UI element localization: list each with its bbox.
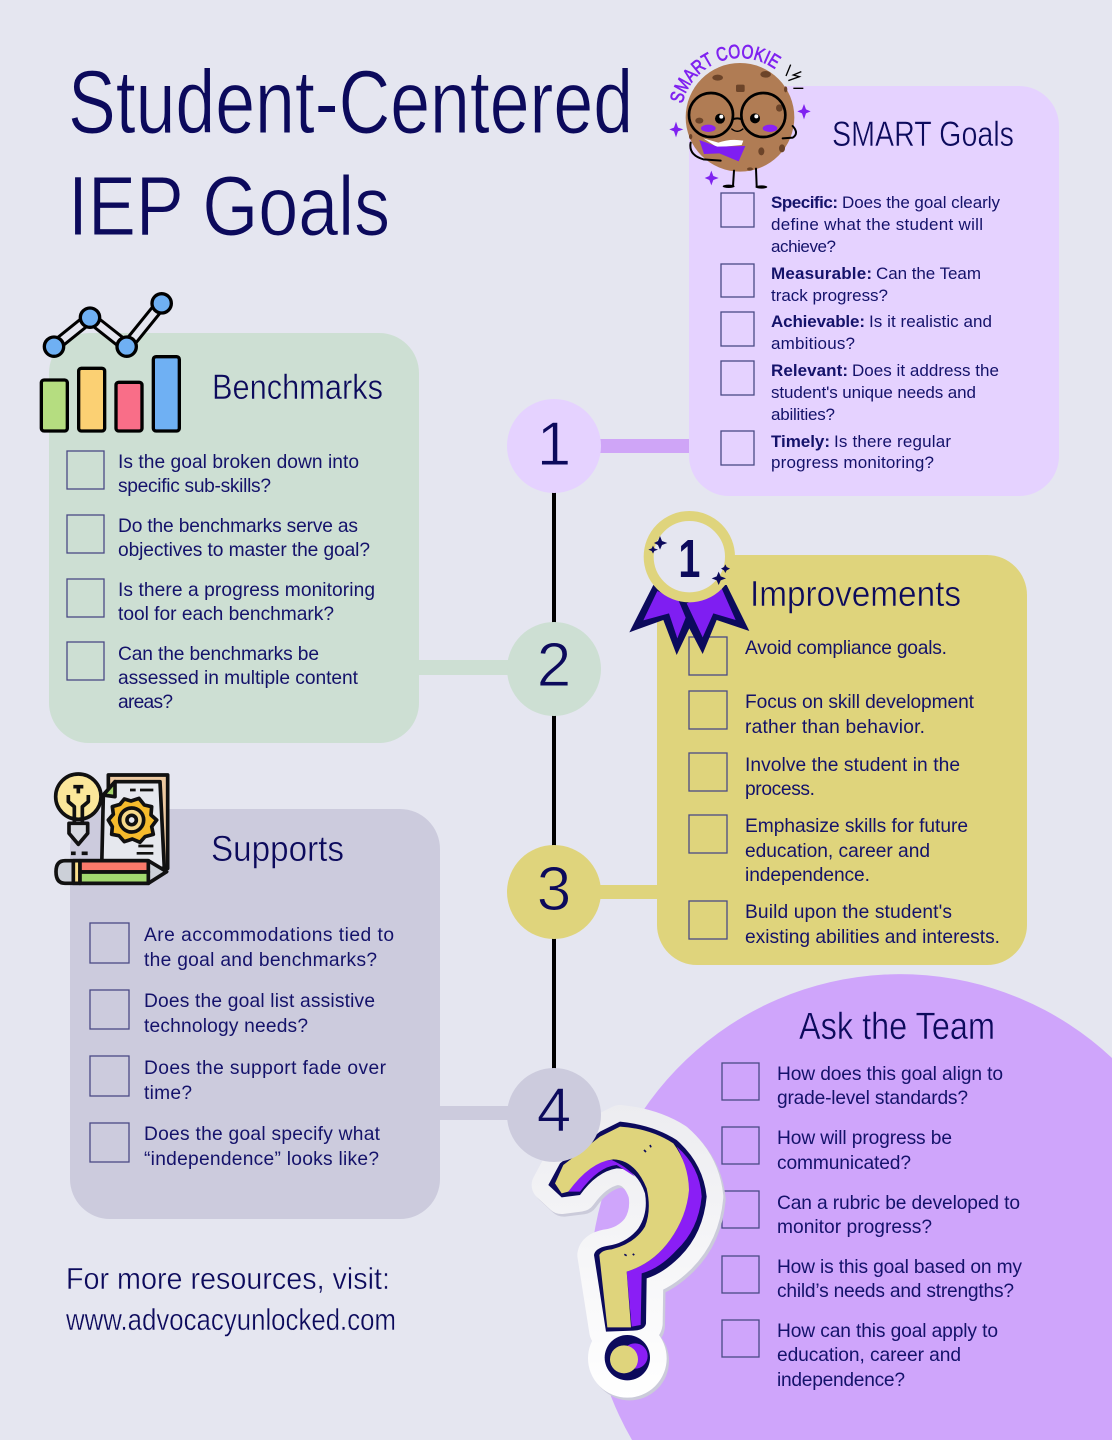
benchmarks checklist text: Do the benchmarks serve as bbox=[118, 516, 358, 537]
icon: idea, gear and pencil bbox=[56, 774, 168, 883]
step 4 circle: 4 bbox=[537, 1076, 571, 1145]
benchmarks checklist text: tool for each benchmark? bbox=[118, 604, 334, 625]
benchmarks checklist text: Is the goal broken down into bbox=[118, 452, 359, 473]
supports checklist text: Does the goal list assistive bbox=[144, 991, 375, 1012]
improvements checklist text: Avoid compliance goals. bbox=[745, 638, 947, 659]
panel: SMART goals bbox=[689, 86, 1059, 496]
improvements checklist text: process. bbox=[745, 779, 815, 800]
improvements checklist text: education, career and bbox=[745, 841, 930, 862]
title: Student-Centered bbox=[68, 53, 633, 153]
checkboxes bbox=[67, 451, 104, 680]
improvements checklist text: existing abilities and interests. bbox=[745, 927, 1000, 948]
benchmarks checklist text: assessed in multiple content bbox=[118, 668, 359, 689]
ask the team checklist text: grade-level standards? bbox=[777, 1088, 968, 1109]
SMART checklist text: ambitious? bbox=[771, 334, 855, 353]
title bbox=[68, 53, 633, 253]
SMART checklist text: Relevant: bbox=[771, 361, 848, 380]
improvements checklist text bbox=[745, 638, 1000, 948]
improvements checklist text: Focus on skill development bbox=[745, 692, 975, 713]
benchmarks checklist text: Is there a progress monitoring bbox=[118, 580, 375, 601]
SMART checklist text: Timely: bbox=[771, 432, 830, 451]
benchmarks checklist text: objectives to master the goal? bbox=[118, 540, 370, 561]
panel: improvements bbox=[657, 555, 1027, 965]
SMART checklist text: progress monitoring? bbox=[771, 453, 934, 472]
panel: benchmarks bbox=[49, 333, 419, 743]
ask the team checklist text: communicated? bbox=[777, 1153, 911, 1174]
SMART checklist text: achieve? bbox=[771, 237, 836, 256]
footer: resources: For more resources, visit: bbox=[66, 1261, 390, 1296]
checkboxes bbox=[689, 637, 727, 939]
SMART checklist text: Measurable: bbox=[771, 264, 872, 283]
heading: supports: Supports bbox=[211, 828, 344, 869]
SMART checklist text: Specific: bbox=[771, 193, 838, 212]
supports checklist text: Does the support fade over bbox=[144, 1058, 387, 1079]
supports checklist text bbox=[144, 925, 394, 1170]
supports checklist text: the goal and benchmarks? bbox=[144, 950, 377, 971]
step 2 circle bbox=[507, 622, 601, 716]
footer: resources bbox=[65, 1261, 396, 1337]
improvements checklist text: rather than behavior. bbox=[745, 717, 925, 738]
benchmarks checklist text: areas? bbox=[118, 692, 173, 713]
step 2 circle: 2 bbox=[537, 631, 571, 700]
icon: question mark sticker bbox=[548, 1122, 709, 1384]
icon: bar chart with line bbox=[41, 294, 179, 431]
SMART checklist text: abilities? bbox=[771, 405, 835, 424]
icon: award ribbon bbox=[629, 516, 749, 655]
SMART checklist text: student's unique needs and bbox=[771, 383, 976, 402]
connector 3 bbox=[598, 885, 658, 899]
improvements checklist text: independence. bbox=[745, 865, 870, 886]
ask the team checklist text: How does this goal align to bbox=[777, 1064, 1003, 1085]
panel: ask the team background bbox=[590, 974, 1112, 1440]
supports checklist text: time? bbox=[144, 1083, 192, 1104]
connector 2 bbox=[418, 660, 510, 675]
heading: SMART goals: SMART Goals bbox=[832, 115, 1014, 154]
icon: smart cookie bbox=[670, 44, 810, 189]
SMART checklist text: define what the student will bbox=[771, 215, 983, 234]
title: IEP Goals bbox=[68, 159, 390, 253]
ask the team checklist text bbox=[777, 1064, 1022, 1391]
benchmarks checklist text bbox=[118, 452, 375, 713]
heading: benchmarks: Benchmarks bbox=[212, 368, 383, 407]
supports checklist text: Does the goal specify what bbox=[144, 1124, 381, 1145]
connector 4 bbox=[440, 1106, 510, 1120]
ask the team content bbox=[722, 1006, 1022, 1391]
SMART checklist text: Is it realistic and bbox=[869, 312, 992, 331]
improvements checklist text: Build upon the student's bbox=[745, 902, 952, 923]
ask the team checklist text: Can a rubric be developed to bbox=[777, 1193, 1020, 1214]
supports checklist text: Are accommodations tied to bbox=[144, 925, 394, 946]
panel: supports bbox=[70, 809, 440, 1219]
ask the team checklist text: education, career and bbox=[777, 1345, 961, 1366]
SMART checklist text: Does the goal clearly bbox=[842, 193, 1000, 212]
timeline line bbox=[552, 446, 556, 1115]
checkboxes bbox=[90, 923, 129, 1162]
SMART checklist text: Does it address the bbox=[852, 361, 999, 380]
ask the team checklist text: How is this goal based on my bbox=[777, 1257, 1022, 1278]
footer: resources: www.advocacyunlocked.com bbox=[65, 1302, 396, 1337]
SMART checklist text: Achievable: bbox=[771, 312, 865, 331]
connector 1 bbox=[600, 439, 690, 453]
improvements checklist text: Emphasize skills for future bbox=[745, 816, 968, 837]
step 1 circle: 1 bbox=[537, 410, 571, 479]
ask the team checklist text: monitor progress? bbox=[777, 1217, 932, 1238]
heading: improvements: Improvements bbox=[750, 573, 961, 614]
supports checklist text: technology needs? bbox=[144, 1016, 308, 1037]
medal number: 1 bbox=[678, 529, 700, 589]
benchmarks checklist text: specific sub-skills? bbox=[118, 476, 271, 497]
step 4 circle bbox=[507, 1068, 601, 1162]
step 1 circle bbox=[507, 399, 601, 493]
ask the team checklist text: child’s needs and strengths? bbox=[777, 1281, 1014, 1302]
checkboxes bbox=[722, 1063, 759, 1357]
ask the team checklist text: independence? bbox=[777, 1370, 905, 1391]
SMART checklist text: Can the Team bbox=[876, 264, 981, 283]
step 3 circle: 3 bbox=[537, 855, 571, 924]
SMART checklist text: Is there regular bbox=[834, 432, 951, 451]
checkboxes bbox=[721, 193, 754, 465]
smart cookie arc text: SMART COOKIE bbox=[670, 44, 782, 103]
SMART checklist text bbox=[771, 193, 1000, 472]
heading: ask the team: Ask the Team bbox=[799, 1006, 995, 1048]
step 3 circle bbox=[507, 845, 601, 939]
benchmarks checklist text: Can the benchmarks be bbox=[118, 644, 319, 665]
improvements checklist text: Involve the student in the bbox=[745, 755, 960, 776]
ask the team checklist text: How can this goal apply to bbox=[777, 1321, 998, 1342]
supports checklist text: “independence” looks like? bbox=[144, 1149, 379, 1170]
SMART checklist text: track progress? bbox=[771, 286, 888, 305]
ask the team checklist text: How will progress be bbox=[777, 1128, 952, 1149]
